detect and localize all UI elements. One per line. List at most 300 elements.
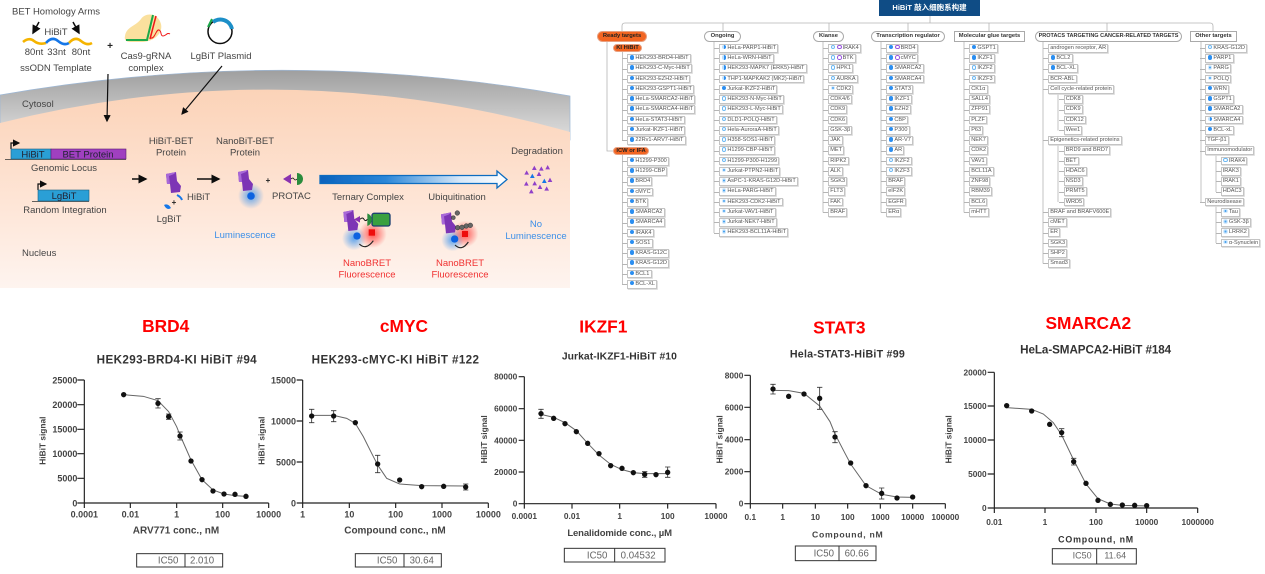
chart title: HeLa-SMAPCA2-HiBiT #184 xyxy=(1020,343,1172,356)
y axis labels: 8000 xyxy=(725,370,744,380)
chart title: HEK293-BRD4-KI HiBiT #94 xyxy=(97,353,257,366)
label: Degradation: Degradation xyxy=(511,146,563,157)
ssODN template wave xyxy=(23,39,92,44)
random integration construct: LgBiT xyxy=(52,191,77,202)
list: Molecular glue targets: GSPT1 xyxy=(977,45,996,51)
heading: cMYC: cMYC xyxy=(380,316,429,336)
list: PROTACS targets: ER xyxy=(1050,229,1058,235)
heading: SMARCA2: SMARCA2 xyxy=(1045,313,1131,333)
list: Molecular glue targets: RBM39 xyxy=(971,188,990,194)
list: Transcription regulator targets: IKZF3 xyxy=(894,168,910,174)
data points xyxy=(770,386,915,501)
label: Ubiquitination: Ubiquitination xyxy=(428,192,486,203)
list: Other targets: Tau xyxy=(1229,209,1238,215)
list: ICW or IFA targets xyxy=(622,157,670,290)
IC50 table: 30.64 xyxy=(410,556,434,567)
x axis labels: 1000 xyxy=(432,509,452,519)
list: Other targets: SMARCA2 xyxy=(1213,106,1240,112)
icon: PROTAC molecule xyxy=(283,173,303,185)
list: KI HiBiT lines: 22Rv1-ARV7-HiBiT xyxy=(635,137,683,143)
list: Ongoing lines: HEK293-MAPK7 (ERK5)-HiBiT xyxy=(727,65,804,71)
list: Other targets xyxy=(1200,44,1261,248)
list: Ongoing lines: HEK293-BCL11A-HiBiT xyxy=(727,229,786,235)
x axis labels: 0.1 xyxy=(745,512,756,522)
label: No Luminescence: No xyxy=(530,219,542,230)
list: Other targets: GSK-3β xyxy=(1229,219,1249,225)
genomic locus construct xyxy=(5,143,126,160)
list: Other targets: α-Synuclein xyxy=(1229,240,1258,246)
panel: HiBiT knock-in cell line tree xyxy=(597,0,1261,290)
y axis title: HiBiT signal xyxy=(38,417,48,465)
x axis labels: 100 xyxy=(841,512,855,522)
label: NanoBiT-BET Protein: NanoBiT-BET xyxy=(216,136,274,147)
icon: HiBiT-BET protein with LgBiT: + xyxy=(172,198,177,207)
y axis labels: 25000 xyxy=(52,375,77,385)
list: Ongoing lines: DLD1-POLQ-HiBiT xyxy=(727,117,775,123)
label: LgBiT Plasmid: LgBiT Plasmid xyxy=(190,51,252,62)
list: PROTACS targets: SHP2 xyxy=(1050,250,1065,256)
y axis labels: 15000 xyxy=(271,375,296,385)
list: Ongoing lines: Jurkat-VAV1-HiBiT xyxy=(727,209,773,215)
x axis labels: 100 xyxy=(1089,517,1103,527)
list: Transcription regulator targets: ERα xyxy=(888,209,899,215)
category: Kianse xyxy=(813,31,844,42)
list: Kinase targets: MET xyxy=(830,147,842,153)
list: Transcription regulator targets: BRAF xyxy=(888,178,903,184)
list: Molecular glue targets: SALL4 xyxy=(971,96,988,102)
list: Ongoing lines: H1299-CBP-HiBiT xyxy=(727,147,773,153)
list: Transcription regulator targets: cMYC xyxy=(901,55,916,61)
x axis labels xyxy=(71,509,281,519)
IC50 table xyxy=(137,554,223,567)
y axis labels: 6000 xyxy=(725,402,744,412)
y axis labels xyxy=(271,375,296,508)
category: Transcription regulator: Transcription regulator xyxy=(876,33,940,39)
label: NanoBRET Fluorescence (ubiquitination): Fluorescence xyxy=(431,270,489,280)
x axis labels: 1 xyxy=(300,509,305,519)
list: Other targets: POLQ xyxy=(1213,76,1229,82)
category: Ready targets: Ready targets xyxy=(603,33,641,39)
x axis labels: 0.0001 xyxy=(512,511,537,521)
list: Ongoing lines: HEK293-N-Myc-HiBiT xyxy=(727,96,782,102)
heading: IKZF1: IKZF1 xyxy=(579,316,628,336)
list: Ongoing lines: Jurkat-PTPN2-HiBiT xyxy=(727,168,778,174)
arrow: right homology arm xyxy=(73,22,79,33)
label: Nucleus: Nucleus xyxy=(22,248,57,259)
label: Cas9-gRNA complex: Cas9-gRNA xyxy=(121,51,172,62)
category: ICW or IFA xyxy=(613,147,649,155)
category: Ongoing xyxy=(704,31,741,42)
heading: STAT3: STAT3 xyxy=(813,318,866,338)
label: Luminescence: Luminescence xyxy=(214,230,276,241)
x axis labels: 100 xyxy=(215,509,230,519)
list: Ongoing lines: H358-SOS1-HiBiT xyxy=(727,137,773,143)
list: Molecular glue targets: BCL6 xyxy=(971,199,985,205)
list: Molecular glue targets: PLZF xyxy=(971,117,985,123)
category: KI HiBiT xyxy=(613,44,642,52)
heading: BRD4: BRD4 xyxy=(142,316,190,336)
list: ICW or IFA targets: SMARCA4 xyxy=(635,219,662,225)
list: Ongoing lines: HeLa-PARP1-HiBiT xyxy=(727,45,776,51)
label: NanoBRET Fluorescence (ubiquitination): NanoBRET xyxy=(436,258,484,269)
list: ICW or IFA targets: BCL-XL xyxy=(635,281,655,287)
y axis labels: 0 xyxy=(291,498,296,508)
list: Ongoing lines: THP1-MAPKAK2 (MK2)-HiBiT xyxy=(727,76,802,82)
y axis labels: 20000 xyxy=(494,467,518,477)
list: Kinase targets: SGK3 xyxy=(830,178,845,184)
list: Other targets: LRRK2 xyxy=(1229,229,1247,235)
list: PROTACS targets: BCL2 xyxy=(1056,55,1070,61)
x axis title: ARV771 conc., nM xyxy=(133,526,219,537)
y axis labels: 10000 xyxy=(52,449,77,459)
y axis labels xyxy=(52,375,77,508)
category: Ready targets xyxy=(597,31,647,42)
y axis labels: 60000 xyxy=(494,404,518,414)
label: nt lengths: 33nt xyxy=(47,47,66,58)
list: Ongoing lines: HeLa-WRN-HiBiT xyxy=(727,55,772,61)
label: PROTAC: PROTAC xyxy=(272,191,311,202)
list: Molecular glue targets: NEK7 xyxy=(971,137,986,143)
label: Ternary Complex: Ternary Complex xyxy=(332,192,404,203)
list: PROTACS targets: NSD3 xyxy=(1066,178,1081,184)
label: No Luminescence: Luminescence xyxy=(505,231,567,242)
tree heading xyxy=(879,0,980,16)
arrow: left homology arm xyxy=(33,22,39,33)
genomic locus construct: BET Protein xyxy=(62,150,114,160)
x axis labels: 1 xyxy=(174,509,179,519)
y axis labels: 10000 xyxy=(271,416,296,426)
list: PROTACS targets: BRAF and BRAFV600E xyxy=(1050,209,1109,215)
list: Other targets: KRAS-G12D xyxy=(1213,45,1245,51)
label: HiBiT-BET Protein: HiBiT-BET xyxy=(149,136,193,147)
list: Kinase targets: CDK6 xyxy=(830,117,845,123)
random integration construct xyxy=(32,184,89,202)
x axis labels: 100 xyxy=(661,511,675,521)
list: Transcription regulator targets: eIF2K xyxy=(888,188,903,194)
x axis labels: 1 xyxy=(617,511,622,521)
dose-response curve xyxy=(312,415,466,486)
label: NanoBiT-BET Protein: Protein xyxy=(230,148,260,158)
list: Transcription regulator targets: SMARCA2 xyxy=(894,65,921,71)
category: Molecular glue targets xyxy=(954,31,1025,42)
x axis title: COmpound, nM xyxy=(1058,535,1133,545)
x axis title: Compound conc., nM xyxy=(344,526,446,537)
IC50 table xyxy=(564,548,665,562)
list: ICW or IFA targets: BRD4 xyxy=(635,178,650,184)
label: LgBiT: LgBiT xyxy=(157,214,182,225)
arrow: template into nucleus xyxy=(107,74,108,121)
list: Transcription regulator targets: CBP xyxy=(894,117,906,123)
y axis labels xyxy=(725,370,744,509)
data points xyxy=(1004,403,1149,508)
list: ICW or IFA targets: SMARCA2 xyxy=(635,209,662,215)
list: ICW or IFA targets: KRAS-G12C xyxy=(635,250,667,256)
y axis labels: 5000 xyxy=(276,457,296,467)
list: Ongoing lines: Jurkat-NEK7-HiBiT xyxy=(727,219,775,225)
x axis labels: 10000 xyxy=(1135,517,1159,527)
list: Transcription regulator targets: IKZF2 xyxy=(894,158,910,164)
tree heading: HiBiT 敲入细胞系构建 xyxy=(892,3,967,12)
label: HiBiT: HiBiT xyxy=(44,27,68,38)
dose-response curve xyxy=(124,395,246,496)
axes xyxy=(744,375,945,509)
IC50 table xyxy=(355,554,441,567)
y axis labels: 0 xyxy=(513,499,518,509)
y axis labels xyxy=(963,367,987,513)
label: Cytosol: Cytosol xyxy=(22,99,54,110)
x axis labels: 1000000 xyxy=(1181,517,1214,527)
y axis labels: 5000 xyxy=(57,474,77,484)
list: Other targets: HDAC3 xyxy=(1223,188,1242,194)
list: ICW or IFA targets: BTK xyxy=(635,199,646,205)
list: Kinase targets: FAK xyxy=(830,199,841,205)
y axis labels: 2000 xyxy=(725,467,744,477)
list: Molecular glue targets: mHTT xyxy=(971,209,987,215)
list: Ongoing lines: Hela-AuroraA-HiBiT xyxy=(727,127,777,133)
axes xyxy=(77,380,269,508)
y axis labels: 5000 xyxy=(968,469,987,479)
category: KI HiBiT: KI HiBiT xyxy=(616,45,639,51)
list: KI HiBiT lines: HEK293-C-Myc-HiBiT xyxy=(635,65,690,71)
y axis title: HiBiT signal xyxy=(944,415,954,463)
chart title: Jurkat-IKZF1-HiBiT #10 xyxy=(562,351,677,362)
list: PROTACS targets xyxy=(1043,44,1123,269)
x axis labels: 0.01 xyxy=(122,509,139,519)
label: nt lengths: 80nt xyxy=(72,47,91,58)
list: ICW or IFA targets: H1299-CBP xyxy=(635,168,665,174)
list: KI HiBiT lines: Jurkat-IKZF1-HiBiT xyxy=(635,127,683,133)
axes xyxy=(519,377,716,509)
error bars xyxy=(1059,429,1076,465)
list: Molecular glue targets: VAV1 xyxy=(971,158,985,164)
list: PROTACS targets: CDK12 xyxy=(1066,117,1084,123)
IC50 table: IC50 xyxy=(814,549,834,560)
list: Kinase targets: RIPK2 xyxy=(830,158,846,164)
arrow: degradation progress xyxy=(320,171,507,188)
list: Molecular glue targets: ZFP91 xyxy=(971,106,988,112)
list: Other targets: IRAK1 xyxy=(1223,178,1239,184)
list: PROTACS targets: Cell cycle-related protein xyxy=(1050,86,1112,92)
list: PROTACS targets: BCL-XL xyxy=(1056,65,1076,71)
x axis labels: 1 xyxy=(1043,517,1048,527)
chart: STAT3 xyxy=(715,318,960,561)
list: PROTACS targets: BCR-ABL xyxy=(1050,76,1074,82)
list: Molecular glue targets: CDK2 xyxy=(971,147,986,153)
x axis labels xyxy=(300,509,501,519)
axes xyxy=(297,380,488,508)
list: Molecular glue targets xyxy=(964,44,999,218)
arrow: complementation xyxy=(197,178,219,180)
list: PROTACS targets: Smad3 xyxy=(1050,260,1068,266)
y axis title: HiBiT signal xyxy=(256,417,266,465)
x axis labels: 10000 xyxy=(256,509,281,519)
category: PROTACS targeting cancer-related targets: PROTACS TARGETING CANCER-RELATED TARGETS xyxy=(1039,33,1178,39)
chart: SMARCA2 xyxy=(944,313,1214,564)
chart title: Hela-STAT3-HiBiT #99 xyxy=(790,348,905,360)
error bars xyxy=(309,409,468,490)
list: Transcription regulator targets: P300 xyxy=(894,127,907,133)
y axis labels xyxy=(494,372,518,509)
x axis labels: 0.01 xyxy=(986,517,1003,527)
list: Kinase targets: IRAK4 xyxy=(843,45,859,51)
x axis labels: 10000 xyxy=(901,512,925,522)
icon: LgBiT plasmid xyxy=(208,19,232,44)
heading: BET homology arms: BET Homology Arms xyxy=(12,6,100,18)
list: PROTACS targets: BET xyxy=(1066,158,1077,164)
list: ICW or IFA targets: BCL1 xyxy=(635,271,649,277)
y axis labels: 10000 xyxy=(963,435,987,445)
list: Ongoing lines xyxy=(714,44,808,238)
chart: BRD4 xyxy=(38,316,281,567)
list: Kinase targets: BRAF xyxy=(830,209,845,215)
list: KI HiBiT lines xyxy=(622,54,696,146)
list: PROTACS targets: WRD5 xyxy=(1066,199,1082,205)
list: Molecular glue targets: IKZF1 xyxy=(977,55,993,61)
list: Transcription regulator targets: EGFR xyxy=(888,199,904,205)
list: ICW or IFA targets: IRAK4 xyxy=(635,230,652,236)
error bars xyxy=(538,409,670,477)
category: Kianse: Kianse xyxy=(819,33,838,39)
label: Random Integration: Random Integration xyxy=(23,205,107,216)
category: Ongoing: Ongoing xyxy=(711,33,734,39)
chart: cMYC xyxy=(256,316,501,567)
x axis labels: 100000 xyxy=(931,512,960,522)
y axis labels: 40000 xyxy=(494,435,518,445)
IC50 table: IC50 xyxy=(1073,551,1092,561)
label: NanoBRET Fluorescence (ternary): Fluorescence xyxy=(338,270,396,280)
axes xyxy=(988,372,1198,513)
y axis labels: 80000 xyxy=(494,372,518,382)
icon: ubiquitinated complex xyxy=(441,211,478,251)
list: Other targets: BCL-xL xyxy=(1213,127,1232,133)
y axis title: HiBiT signal xyxy=(715,415,725,463)
list: Transcription regulator targets: BRD4 xyxy=(901,45,915,51)
list: ICW or IFA targets: cMYC xyxy=(635,189,651,195)
label: ssODN Template: ssODN Template xyxy=(20,63,92,74)
y axis labels: 15000 xyxy=(963,401,987,411)
list: KI HiBiT lines: HeLa-STAT3-HiBiT xyxy=(635,117,683,123)
list: Transcription regulator targets: EZH2 xyxy=(894,106,909,112)
list: KI HiBiT lines: HeLa-SMARCA2-HiBiT xyxy=(635,96,693,102)
y axis labels: 0 xyxy=(982,503,987,513)
x axis labels: 1 xyxy=(780,512,785,522)
x axis labels: 0.0001 xyxy=(71,509,98,519)
IC50 table: IC50 xyxy=(377,556,397,567)
IC50 table: IC50 xyxy=(587,550,607,561)
list: Kinase targets: CDK2 xyxy=(836,86,851,92)
category: PROTACS targeting cancer-related targets xyxy=(1035,31,1182,42)
IC50 table: 2.010 xyxy=(190,556,214,567)
list: Molecular glue targets: IKZF2 xyxy=(977,65,993,71)
dose-response curve xyxy=(541,414,668,474)
list: Kinase targets: JAK xyxy=(830,137,840,143)
list: KI HiBiT lines: HEK293-GSPT1-HiBiT xyxy=(635,86,692,92)
list: Transcription regulator targets xyxy=(881,44,925,218)
category: Molecular glue targets: Molecular glue targets xyxy=(959,33,1020,39)
label: HiBiT-BET Protein: Protein xyxy=(156,148,186,158)
x axis labels xyxy=(512,511,728,521)
list: PROTACS targets: Epigenetics-related proteins xyxy=(1050,137,1120,143)
list: PROTACS targets: cMET xyxy=(1050,219,1065,225)
list: Other targets: WRN xyxy=(1213,86,1227,92)
list: PROTACS targets: Wee1 xyxy=(1066,127,1080,133)
chart: IKZF1 xyxy=(479,316,728,562)
icon: HiBiT-BET protein with LgBiT xyxy=(164,172,182,209)
cytosol membrane band xyxy=(0,70,570,140)
label: Genomic Locus: Genomic Locus xyxy=(31,163,97,174)
x axis labels: 10000 xyxy=(476,509,501,519)
list: Other targets: PARG xyxy=(1213,65,1229,71)
dose-response curve xyxy=(1007,408,1147,506)
y axis labels: 15000 xyxy=(52,425,77,435)
data points xyxy=(309,413,468,490)
icon: NanoBiT-BET protein xyxy=(238,170,264,209)
panel: HiBiT knock-in mechanism diagram xyxy=(0,6,570,288)
list: PROTACS targets: HDAC6 xyxy=(1066,168,1085,174)
arrow: plasmid into nucleus xyxy=(182,66,222,114)
list: KI HiBiT lines: HEK293-BRD4-HiBiT xyxy=(635,55,689,61)
list: Other targets: TGF-β1 xyxy=(1207,137,1227,143)
x axis labels: 100 xyxy=(388,509,403,519)
y axis title: HiBiT signal xyxy=(479,415,489,463)
list: PROTACS targets: PRMT5 xyxy=(1066,188,1085,194)
chart title: HEK293-cMYC-KI HiBiT #122 xyxy=(312,353,480,366)
icon: degraded fragments xyxy=(524,165,552,193)
list: Kinase targets: CDK9 xyxy=(830,106,845,112)
list: Molecular glue targets: P63 xyxy=(971,127,981,133)
list: Kinase targets: HPK1 xyxy=(836,65,851,71)
list: Kinase targets: CDK4/6 xyxy=(830,96,850,102)
label: nt lengths: 80nt xyxy=(25,47,44,58)
genomic locus construct: HiBiT xyxy=(21,150,45,160)
arrow: expression xyxy=(132,178,146,180)
list: PROTACS targets: CDK9 xyxy=(1066,106,1081,112)
IC50 table: 60.66 xyxy=(845,549,869,560)
list: Molecular glue targets: IKZF3 xyxy=(977,76,993,82)
list: KI HiBiT lines: HeLa-SMARCA4-HiBiT xyxy=(635,106,693,112)
x axis title: Lenalidomide conc., µM xyxy=(567,528,672,539)
list: Kinase targets: GSK-3β xyxy=(830,127,850,133)
list: Transcription regulator targets: AR-V7 xyxy=(894,137,911,143)
IC50 table xyxy=(795,546,876,561)
list: ICW or IFA targets: SOS1 xyxy=(635,240,650,246)
list: Other targets: IRAK4 xyxy=(1229,158,1245,164)
list: Other targets: Neurodisease xyxy=(1207,199,1242,205)
x axis labels: 0.01 xyxy=(564,511,580,521)
category: Transcription regulator xyxy=(871,31,945,42)
x axis labels xyxy=(745,512,960,522)
list: Kinase targets: BTK xyxy=(843,55,853,61)
list: Ongoing lines: HEK293-L-Myc-HiBiT xyxy=(727,106,781,112)
y axis labels: 0 xyxy=(72,498,77,508)
list: Molecular glue targets: ZNF98 xyxy=(971,178,988,184)
list: PROTACS targets: BRD9 and BRD7 xyxy=(1066,147,1108,153)
label: NanoBRET Fluorescence (ternary): NanoBRET xyxy=(343,258,391,269)
plus sign: + xyxy=(107,41,113,52)
list: PROTACS targets: CDK8 xyxy=(1066,96,1081,102)
list: Transcription regulator targets: STAT3 xyxy=(894,86,911,92)
list: Molecular glue targets: CK1α xyxy=(971,86,985,92)
list: Transcription regulator targets: IKZF1 xyxy=(894,96,910,102)
list: Other targets: SMARCA4 xyxy=(1213,117,1240,123)
plus sign: + xyxy=(266,176,271,185)
category: Other targets: Other targets xyxy=(1195,33,1232,39)
list: Ongoing lines: AsPC-1-KRAS-G12D-HiBiT xyxy=(727,178,796,184)
IC50 table xyxy=(1052,549,1136,564)
category: Other targets xyxy=(1190,31,1237,42)
x axis labels: 10 xyxy=(344,509,354,519)
list: Other targets: GSPT1 xyxy=(1213,96,1232,102)
